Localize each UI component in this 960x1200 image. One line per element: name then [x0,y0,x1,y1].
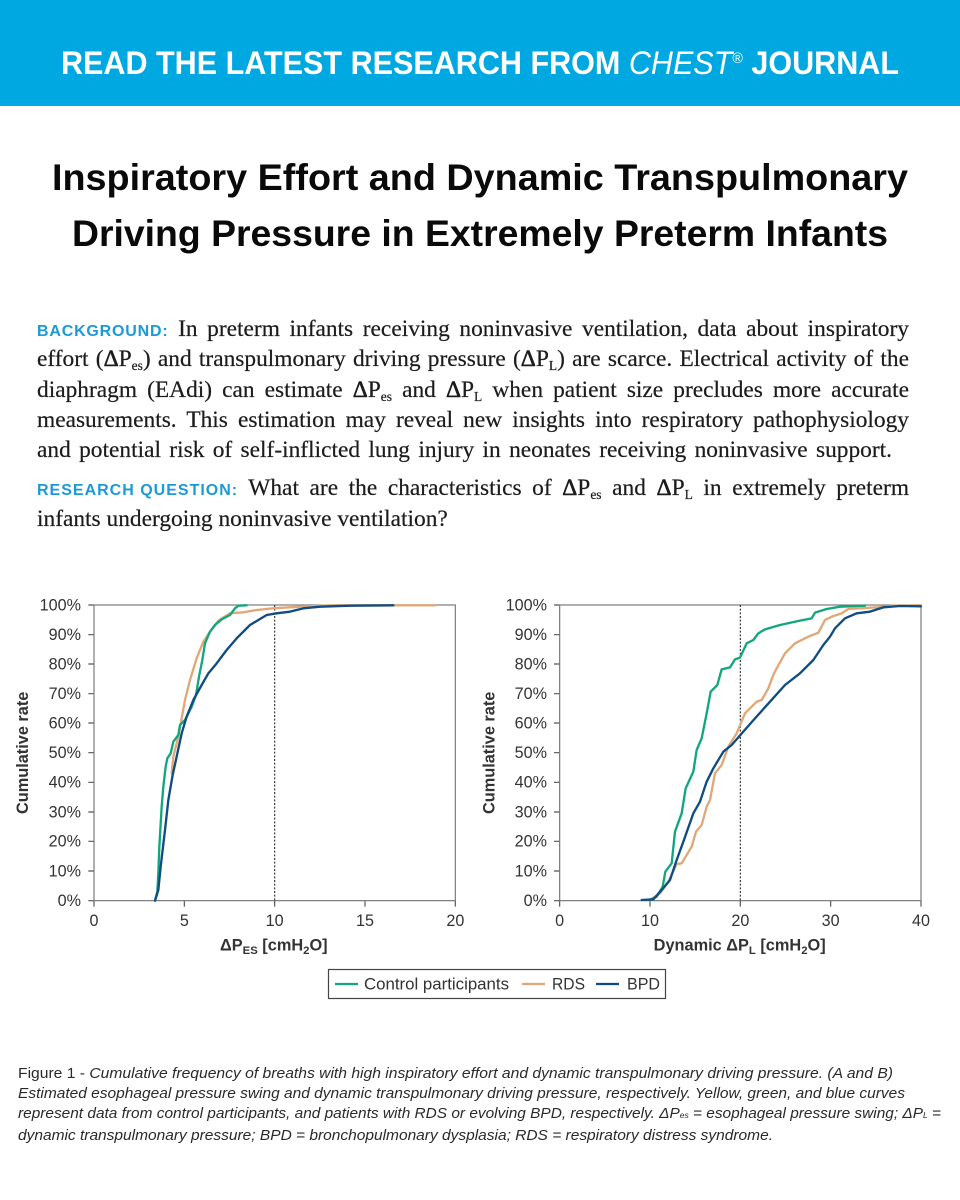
x axis labels: 40 [912,912,930,930]
x axis title: Dynamic ΔP [654,937,749,955]
banner text: ® [732,50,743,67]
x axis title: [cmH [258,937,303,955]
legend [328,968,666,1000]
y axis title: Cumulative rate [480,692,498,814]
x axis labels [90,912,464,930]
y axis labels: 50% [49,744,81,762]
curve: BPD [155,605,393,901]
text block: background: BACKGROUND: [37,323,168,340]
curve: RDS [650,605,920,900]
x axis labels: 20 [731,912,749,930]
x axis labels: 0 [90,912,98,930]
x axis title: L [749,945,756,957]
title: Driving Pressure in Extremely Preterm Infants [72,212,888,254]
figure caption: dynamic transpulmonary pressure; BPD = bronchopulmonary dysplasia; RDS = respiratory distress syndrome. [18,1128,773,1144]
x axis labels: 10 [641,912,659,930]
y axis labels: 100% [40,596,81,614]
y axis labels: 40% [49,774,81,792]
y axis labels: 10% [49,862,81,880]
text block: research question [37,475,909,532]
x axis labels: 0 [555,912,564,930]
y axis labels: 10% [515,862,547,880]
y axis labels: 70% [515,685,547,703]
x axis title: 2 [801,945,808,957]
header banner [0,0,960,106]
banner text: JOURNAL [743,45,899,81]
x axis labels: 30 [822,912,840,930]
figure caption: Figure 1 - Cumulative frequency of breaths with high inspiratory effort and dynamic transpulmonary driving pressure. (A and B) [18,1066,893,1082]
x axis title: ΔP [220,937,243,955]
x axis labels: 5 [180,912,189,930]
title: Inspiratory Effort and Dynamic Transpulmonary [52,156,908,198]
y axis labels: 60% [49,714,81,732]
y axis labels: 30% [49,803,81,821]
x axis title: [cmH [756,937,801,955]
y axis labels: 50% [515,744,547,762]
y axis labels: 80% [49,655,81,673]
x axis labels: 10 [266,912,284,930]
y axis labels: 60% [515,714,547,732]
chart A: cumulative rate vs delta Pes [14,596,464,957]
text block: research question: What are the characteristics of ΔPes and ΔPL in extremely preterm [248,475,909,502]
text block: background: diaphragm (EAdi) can estimate ΔPes and ΔPL when patient size precludes more accurate [37,377,909,404]
y axis labels: 90% [515,626,547,644]
y axis labels: 20% [49,833,81,851]
x axis labels: 20 [446,912,464,930]
x axis labels: 15 [356,912,374,930]
y axis labels: 30% [515,803,547,821]
text block: research question: RESEARCH QUESTION: [37,482,238,499]
text block: research question: infants undergoing noninvasive ventilation? [37,506,448,532]
y axis labels [40,596,81,910]
x axis title: ES [243,945,258,957]
legend: BPD [627,976,660,994]
legend: Control participants [364,976,509,994]
y axis labels: 20% [515,833,547,851]
text block: background: measurements. This estimation may reveal new insights into respiratory pathophysiology [37,407,909,433]
y axis labels: 90% [49,626,81,644]
y axis labels: 0% [524,892,547,910]
y axis labels: 70% [49,685,81,703]
banner text: READ THE LATEST RESEARCH FROM CHEST [61,45,737,81]
text block: background [37,316,909,463]
x axis title: O] [309,937,328,955]
text block: background: effort (ΔPes) and transpulmonary driving pressure (ΔPL) are scarce. Electrical activity of the [37,346,909,373]
text block: background: and potential risk of self-inflicted lung injury in neonates receiving noninvasive support. [37,437,892,463]
x axis title: 2 [303,945,309,957]
y axis labels [506,596,547,910]
figure caption [18,1066,942,1144]
curve: control participants [155,605,247,901]
curve: BPD [642,606,921,900]
y axis labels: 40% [515,774,547,792]
figure caption: represent data from control participants, and patients with RDS or evolving BPD, respectively. ΔP es = esophageal pressure swing; ΔP L = [18,1106,942,1122]
curve: control participants [650,606,865,900]
figure caption: Estimated esophageal pressure swing and dynamic transpulmonary driving pressure, respectively. Yellow, green, and blue curves [18,1086,905,1102]
title [52,156,908,254]
y axis labels: 100% [506,596,547,614]
x axis title: O] [808,937,826,955]
curve: RDS [172,605,435,773]
y axis labels: 0% [58,892,81,910]
y axis labels: 80% [515,655,547,673]
y axis title: Cumulative rate [14,692,32,814]
text block: background: In preterm infants receiving noninvasive ventilation, data about inspiratory [178,316,909,342]
legend: RDS [552,976,585,994]
chart B: cumulative rate vs dynamic delta PL [480,596,930,957]
x axis labels [555,912,930,930]
